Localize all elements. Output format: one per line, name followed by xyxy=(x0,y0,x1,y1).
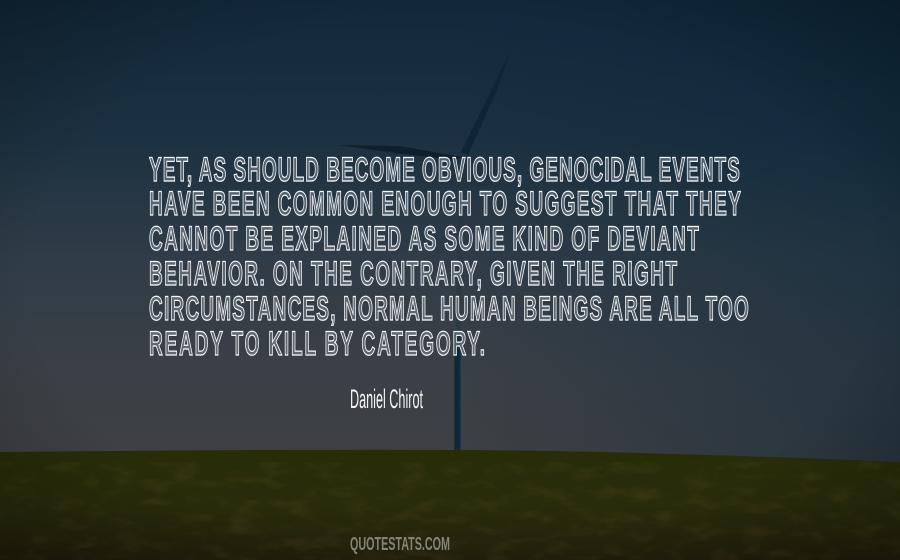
quote text: READY TO KILL BY CATEGORY. xyxy=(149,324,485,362)
watermark: QUOTESTATS.COM xyxy=(350,534,450,554)
quote text: YET, AS SHOULD BECOME OBVIOUS, GENOCIDAL EVENTS xyxy=(149,150,740,188)
quote text: CIRCUMSTANCES, NORMAL HUMAN BEINGS ARE ALL TOO xyxy=(149,289,749,327)
quote text: CANNOT BE EXPLAINED AS SOME KIND OF DEVIANT xyxy=(149,219,699,257)
background: grass field xyxy=(0,450,900,560)
quote text xyxy=(149,150,749,362)
quote text: BEHAVIOR. ON THE CONTRARY, GIVEN THE RIGHT xyxy=(149,254,677,292)
quote poster: Daniel Chirot xyxy=(350,384,423,414)
quote text: HAVE BEEN COMMON ENOUGH TO SUGGEST THAT THEY xyxy=(149,184,741,222)
icon: wind turbine xyxy=(338,52,510,451)
